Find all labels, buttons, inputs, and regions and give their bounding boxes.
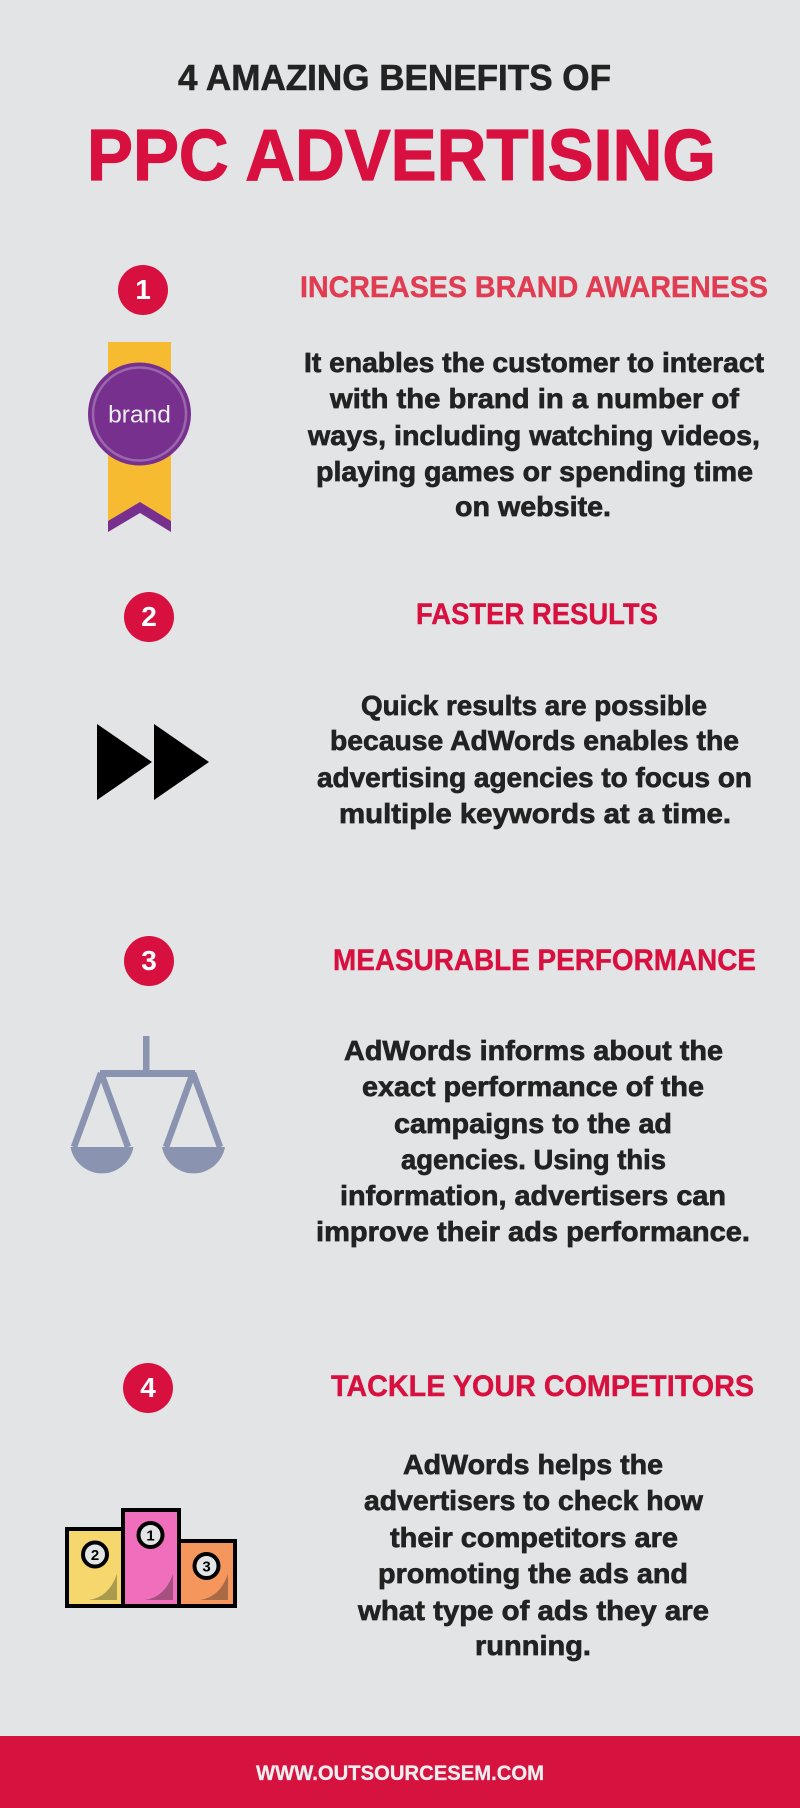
body text 4: running. bbox=[475, 1630, 591, 1661]
icon: podium: 2 bbox=[91, 1547, 99, 1564]
body text 3: information, advertisers can bbox=[340, 1180, 726, 1211]
icon: podium bbox=[67, 1510, 235, 1606]
number badge 1: 1 bbox=[135, 274, 151, 305]
body text 1: with the brand in a number of bbox=[329, 383, 740, 414]
heading 4: TACKLE YOUR COMPETITORS bbox=[331, 1370, 754, 1403]
footer bar: WWW.OUTSOURCESEM.COM bbox=[256, 1762, 544, 1785]
body text 4: AdWords helps the bbox=[403, 1449, 663, 1480]
body text 3: exact performance of the bbox=[362, 1071, 704, 1102]
body text 2: multiple keywords at a time. bbox=[339, 798, 731, 829]
number badge 2 bbox=[124, 592, 174, 642]
icon: brand ribbon: brand bbox=[108, 402, 171, 428]
footer bar bbox=[0, 1736, 800, 1808]
title: 4 AMAZING BENEFITS OF bbox=[178, 57, 611, 98]
title: PPC ADVERTISING bbox=[87, 116, 716, 196]
icon: podium: 3 bbox=[202, 1558, 211, 1576]
body text 1: playing games or spending time bbox=[316, 456, 753, 487]
body text 3: AdWords informs about the bbox=[344, 1035, 723, 1066]
number badge 3 bbox=[124, 936, 174, 986]
heading 3: MEASURABLE PERFORMANCE bbox=[333, 944, 756, 977]
body text 2: advertising agencies to focus on bbox=[317, 762, 752, 793]
body text 4: advertisers to check how bbox=[364, 1485, 703, 1516]
icon: podium: 1 bbox=[146, 1528, 155, 1544]
heading 2: FASTER RESULTS bbox=[416, 598, 658, 631]
panel: faster results bbox=[97, 592, 752, 829]
number badge 4 bbox=[123, 1363, 173, 1413]
body text 3: agencies. Using this bbox=[401, 1144, 666, 1175]
body text 2 bbox=[317, 690, 752, 829]
body text 4: promoting the ads and bbox=[378, 1558, 688, 1589]
panel: tackle your competitors bbox=[67, 1363, 754, 1661]
body text 1: on website. bbox=[455, 491, 611, 522]
number badge 3: 3 bbox=[141, 945, 157, 976]
body text 1: It enables the customer to interact bbox=[304, 347, 764, 378]
icon: fast forward arrows bbox=[97, 724, 209, 800]
panel: measurable performance bbox=[70, 936, 756, 1247]
body text 4: what type of ads they are bbox=[357, 1595, 709, 1626]
number badge 2: 2 bbox=[141, 601, 157, 632]
heading 1: INCREASES BRAND AWARENESS bbox=[300, 271, 768, 304]
body text 2: because AdWords enables the bbox=[330, 725, 739, 756]
body text 4 bbox=[357, 1449, 709, 1661]
panel: increases brand awareness bbox=[88, 265, 768, 532]
body text 3 bbox=[316, 1035, 750, 1247]
body text 2: Quick results are possible bbox=[361, 690, 707, 721]
number badge 4: 4 bbox=[140, 1372, 156, 1403]
body text 1 bbox=[304, 347, 764, 522]
icon: balance scale bbox=[70, 1036, 225, 1173]
icon: brand ribbon bbox=[88, 342, 191, 532]
body text 1: ways, including watching videos, bbox=[307, 420, 760, 451]
body text 3: improve their ads performance. bbox=[316, 1216, 750, 1247]
number badge 1 bbox=[118, 265, 168, 315]
body text 3: campaigns to the ad bbox=[394, 1108, 672, 1139]
title bbox=[87, 57, 716, 196]
body text 4: their competitors are bbox=[390, 1522, 678, 1553]
